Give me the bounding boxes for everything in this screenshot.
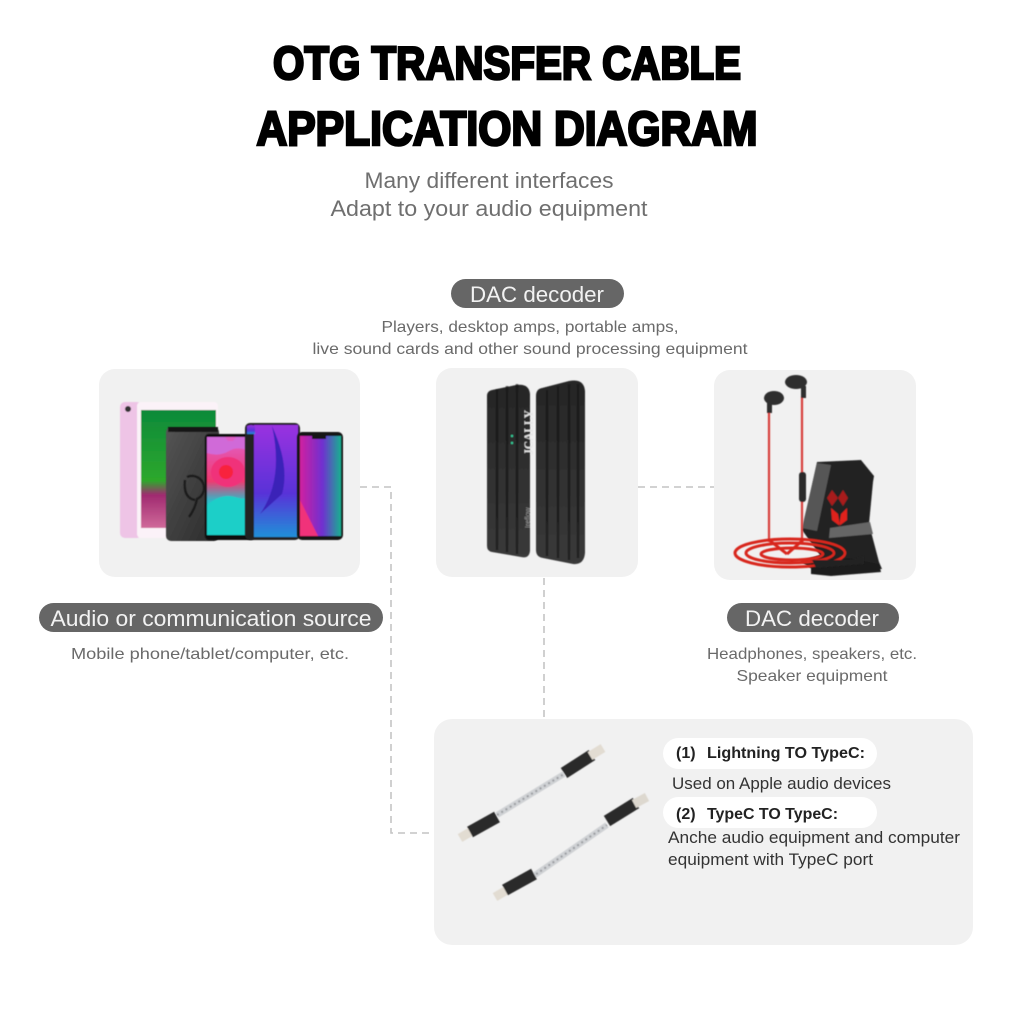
text: DAC description: live sound cards and other sound processing equipment (312, 341, 748, 358)
subtitle (330, 168, 648, 221)
text: DAC description (312, 319, 748, 358)
text: DAC description: Players, desktop amps, portable amps, (382, 319, 678, 336)
heading: DAC decoder right: DAC decoder (745, 606, 879, 631)
icon: earphones (735, 375, 864, 568)
text: source description: Mobile phone/tablet/computer, etc. (71, 646, 349, 663)
icon: DAC front: JCALLY (521, 409, 536, 455)
label: lightning: Lightning TO TypeC: (707, 745, 865, 762)
text: output description: Speaker equipment (736, 668, 888, 685)
label: typec: (2) (676, 806, 696, 823)
icon: DAC front (487, 384, 536, 557)
panel: source devices (99, 369, 360, 577)
heading: DAC decoder top: DAC decoder (470, 282, 604, 307)
label: typec (663, 797, 877, 828)
subtitle: Adapt to your audio equipment (330, 196, 648, 221)
title: OTG TRANSFER CABLE (273, 37, 741, 89)
icon: DAC back (536, 380, 585, 564)
text: output description: Headphones, speakers, etc. (707, 646, 917, 663)
label: lightning: (1) (676, 745, 696, 762)
title: APPLICATION DIAGRAM (256, 103, 758, 156)
text: typec description: equipment with TypeC port (668, 851, 873, 869)
subtitle: Many different interfaces (364, 168, 614, 193)
panel: headphones and speaker (714, 370, 916, 580)
icon: speaker (800, 460, 882, 576)
panel: cables (434, 719, 973, 945)
heading: source: Audio or communication source (50, 606, 372, 631)
icon: cable 1 (460, 748, 603, 838)
label: lightning (663, 738, 877, 769)
icon: black phone (166, 427, 219, 541)
icon: cable 2 (495, 797, 647, 897)
icon: tablet (120, 402, 218, 538)
heading: DAC decoder top (451, 279, 624, 308)
icon: front phone (205, 434, 255, 540)
label: typec: TypeC TO TypeC: (707, 806, 838, 823)
title (256, 37, 758, 156)
panel: DAC device (436, 368, 638, 577)
text: typec description: Anche audio equipment and computer (668, 829, 961, 847)
text: lightning description: Used on Apple audio devices (672, 775, 891, 793)
icon: right phone (297, 432, 343, 540)
heading: DAC decoder right (727, 603, 899, 632)
icon: DAC front: Ireflow (525, 506, 532, 528)
text: typec description (668, 829, 961, 869)
connector lines (360, 487, 714, 833)
icon: purple phone (245, 423, 300, 540)
text: output description (707, 646, 917, 685)
